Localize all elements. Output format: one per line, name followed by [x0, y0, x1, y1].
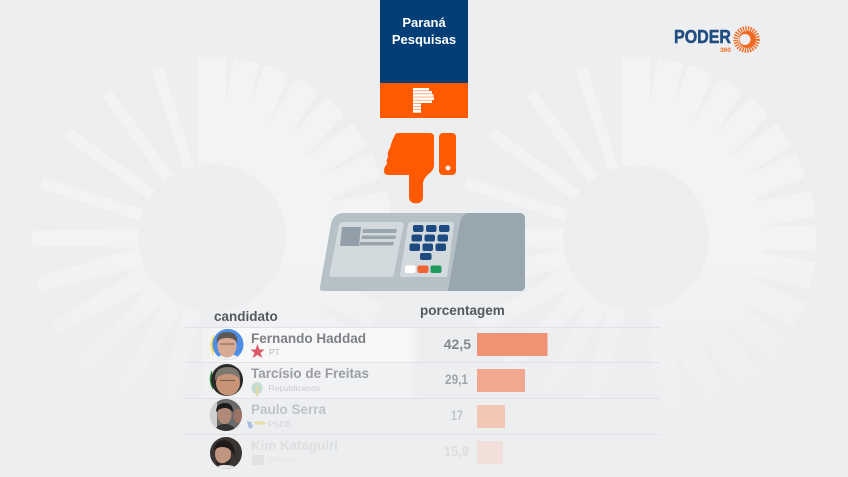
table row: Kim Kataguiri: [210, 437, 503, 471]
candidate photo: Fernando Haddad: [210, 329, 244, 362]
screen: [329, 222, 404, 277]
logo: Poder360: [674, 26, 757, 54]
icon: PSDB: [247, 421, 267, 429]
bar: [477, 333, 548, 356]
table row: Tarcísio de Freitas: [210, 364, 525, 396]
percentage value: 15,9: [444, 443, 469, 459]
icon: Missão: [252, 455, 264, 465]
icon: PT star: [250, 344, 264, 358]
logo: Poder360: PODER: [674, 26, 731, 47]
bar: [477, 405, 505, 428]
icon: thumbs down: [384, 133, 456, 204]
candidate name: Kim Kataguiri: [251, 437, 338, 453]
party name: Republicanos: [268, 383, 320, 393]
candidate name: Fernando Haddad: [251, 330, 366, 346]
candidate photo: Paulo Serra: [210, 399, 242, 431]
table column heading: porcentagem: porcentagem: [420, 303, 505, 318]
background sunburst: left: [32, 57, 393, 417]
pollster badge: Paraná Pesquisas: [380, 0, 468, 118]
table row: Fernando Haddad: [202, 328, 548, 362]
keypad: [400, 222, 454, 277]
pollster name: Pesquisas: [392, 32, 456, 47]
icon: pollster P logo: [413, 88, 434, 113]
icon: Republicanos: [252, 382, 262, 396]
party name: PT: [269, 347, 280, 357]
table row rules: [185, 328, 660, 434]
party name: PSDB: [268, 419, 291, 429]
table column heading: candidato: candidato: [214, 309, 278, 324]
background sunburst: right: [456, 57, 817, 417]
pollster name: Paraná: [402, 15, 446, 30]
logo: Poder360: 360: [720, 47, 731, 54]
bar: [477, 441, 503, 464]
percentage value: 42,5: [444, 336, 471, 352]
pollster name: [392, 15, 456, 47]
bar: [477, 369, 525, 392]
candidate photo: Tarcísio de Freitas: [210, 364, 243, 396]
percentage value: 29,1: [445, 371, 468, 387]
candidate name: Tarcísio de Freitas: [251, 365, 369, 381]
party name: Missão: [268, 454, 295, 464]
table row: Paulo Serra: [210, 399, 505, 431]
candidate name: Paulo Serra: [251, 401, 326, 417]
icon: voting machine: [320, 213, 525, 291]
percentage value: 17: [451, 407, 463, 423]
candidate photo: Kim Kataguiri: [210, 437, 242, 471]
